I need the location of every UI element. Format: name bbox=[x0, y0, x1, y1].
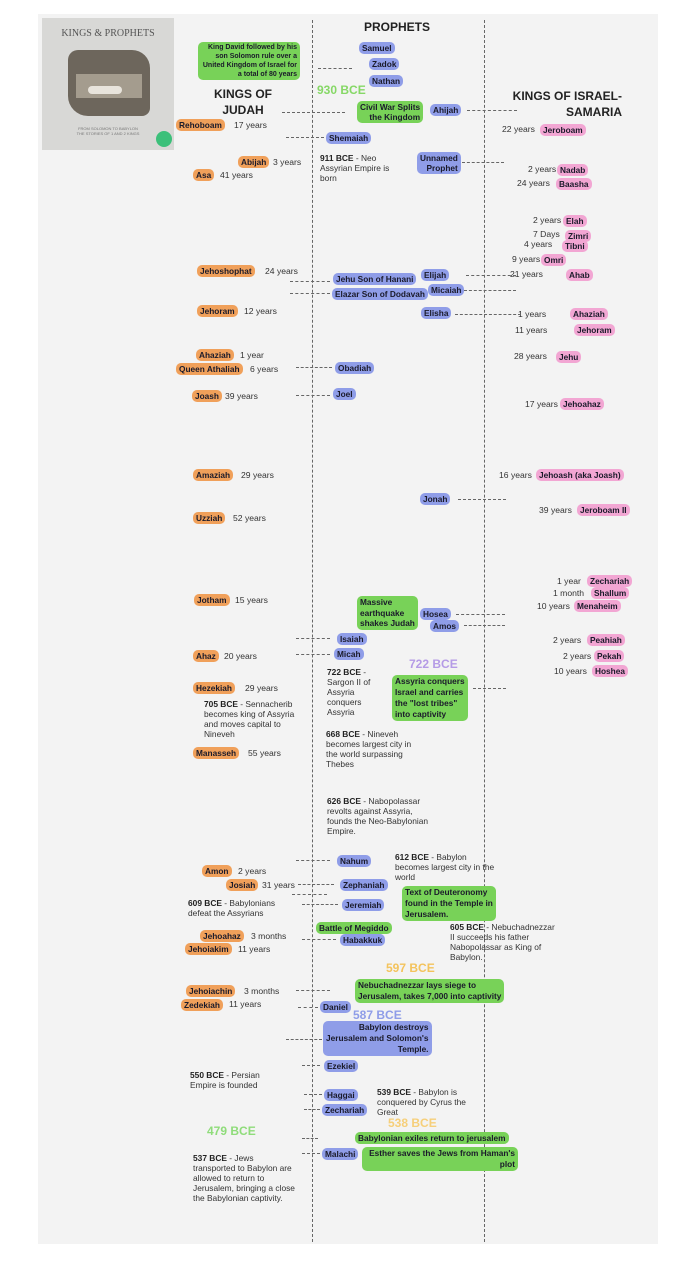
event: siege: Jerusalem, takes 7,000 into captivity bbox=[358, 991, 501, 1001]
kings: Amon, Josiah: Amon bbox=[205, 866, 229, 876]
event: earthquake bbox=[357, 596, 418, 630]
prophet: Samuel: Samuel bbox=[362, 43, 392, 53]
text: 705 BCE: 705 BCE - Sennacherib becomes king of Assyria and moves capital to Nineveh bbox=[204, 699, 294, 739]
text: 21 years bbox=[510, 269, 543, 279]
text: 722 BCE Sargon: 722 BCE - Sargon II of Assyria conquers Assyria bbox=[327, 667, 370, 717]
text: 52 years bbox=[233, 513, 266, 523]
event: Esther: Esther saves the Jews from Haman's plot bbox=[369, 1148, 515, 1169]
event: Deuteronomy: Jerusalem. bbox=[405, 909, 448, 919]
prophet: Ezekiel: Ezekiel bbox=[327, 1061, 355, 1071]
text: 11 years bbox=[238, 944, 270, 954]
text: 11 years bbox=[515, 325, 547, 335]
event: earthquake: shakes Judah bbox=[360, 618, 415, 628]
event: Assyria conquers Israel: Assyria conquers bbox=[395, 676, 465, 686]
text: 539 BCE: 539 BCE - Babylon is conquered by Cyrus the Great bbox=[377, 1087, 466, 1117]
text: 10 years bbox=[554, 666, 587, 676]
prophet: Nahum: Nahum bbox=[340, 856, 368, 866]
date: 538 BCE: 538 BCE bbox=[388, 1116, 437, 1130]
prophets: Hosea, Amos, Isaiah, Micah: Hosea bbox=[423, 609, 448, 619]
text: Zimri bbox=[568, 231, 588, 241]
king: Jeroboam: 22 years bbox=[502, 124, 535, 134]
text: Omri bbox=[544, 255, 563, 265]
prophet: Jonah: Jonah bbox=[423, 494, 447, 504]
text: 2 years bbox=[238, 866, 266, 876]
text: Micah bbox=[337, 649, 361, 659]
text: Jeremiah bbox=[345, 900, 381, 910]
text: Jeroboam bbox=[543, 125, 583, 135]
event: siege bbox=[355, 979, 504, 1003]
prophets: Haggai, Zechariah: Haggai bbox=[327, 1090, 355, 1100]
date: 930 BCE: 930 BCE bbox=[317, 83, 366, 97]
prophet: Nathan: Nathan bbox=[372, 76, 400, 86]
event: Battle of Megiddo: Battle of Megiddo bbox=[319, 923, 389, 933]
kings: Amon, Josiah bbox=[202, 865, 232, 877]
kings: Jehoiachin, Zedekiah: Jehoiachin bbox=[189, 986, 232, 996]
text: Menaheim bbox=[577, 601, 618, 611]
prophet: Daniel: Daniel bbox=[323, 1002, 348, 1012]
king: Jotham: Jotham bbox=[197, 595, 227, 605]
text: Elisha bbox=[424, 308, 448, 318]
text: 626 BCE: 626 BCE - Nabopolassar revolts against Assyria, founds the Neo-Babylonian Empire. bbox=[327, 796, 428, 836]
text: 17 years bbox=[234, 120, 267, 130]
text: 29 years bbox=[245, 683, 278, 693]
text: 7 Days bbox=[533, 229, 560, 239]
text: 41 years bbox=[220, 170, 253, 180]
king: Jotham bbox=[194, 594, 230, 606]
text: Joash bbox=[195, 391, 219, 401]
text: 911 BCE: 911 BCE - Neo Assyrian Empire is born bbox=[320, 153, 389, 183]
text: Jehoash (aka Joash) bbox=[539, 470, 621, 480]
king: Asa: Asa bbox=[196, 170, 211, 180]
cover image: Kings & Prophets: THE STORIES OF 1 AND 2 KINGS bbox=[77, 131, 139, 136]
prophets: Zephaniah, Jeremiah: Zephaniah bbox=[343, 880, 384, 890]
prophet: Zadok bbox=[369, 58, 399, 70]
event: civil war bbox=[357, 101, 423, 123]
heading: kings of judah: KINGS OF JUDAH bbox=[214, 87, 272, 117]
date: 722 BCE: 722 BCE bbox=[409, 657, 458, 671]
king: Jehoshophat: Jehoshophat bbox=[200, 266, 252, 276]
kings: Peahiah, Pekah, Hoshea: 2 years bbox=[553, 635, 581, 645]
date: 479 BCE: 479 BCE bbox=[207, 1124, 256, 1138]
kings: Zechariah, Shallum, Menaheim: 1 year bbox=[557, 576, 581, 586]
prophet: Unnamed Prophet bbox=[417, 152, 461, 174]
text: 55 years bbox=[248, 748, 281, 758]
text: 668 BCE: 668 BCE - Nineveh becomes largest city in the world surpassing Thebes bbox=[326, 729, 411, 769]
text: Josiah bbox=[229, 880, 255, 890]
text: 31 years bbox=[262, 880, 295, 890]
prophet: Unnamed Prophet: Unnamed bbox=[420, 153, 458, 163]
text: 612 BCE: 612 BCE - Babylon becomes largest city in the world bbox=[395, 852, 494, 882]
event: siege: Nebuchadnezzar lays siege to bbox=[358, 980, 476, 990]
kings: Ahaziah, Jehoram (Israel): 1 years bbox=[518, 309, 546, 319]
king: Hezekiah: Hezekiah bbox=[196, 683, 232, 693]
text: 537 BCE: 537 BCE - Jews transported to Babylon are allowed to return to Jerusalem, bringing a close the Babylonian captivity. bbox=[193, 1153, 295, 1203]
event: Assyria conquers Israel: into captivity bbox=[395, 709, 446, 719]
prophet: Malachi: Malachi bbox=[325, 1149, 355, 1159]
king: Ahaz: Ahaz bbox=[196, 651, 216, 661]
kings: Jehoash, Jeroboam II: 16 years bbox=[499, 470, 532, 480]
text: Shallum bbox=[594, 588, 626, 598]
text: 29 years bbox=[241, 470, 274, 480]
text: 20 years bbox=[224, 651, 257, 661]
event: Babylon destroys Jerusalem: Jerusalem and Solomon's bbox=[326, 1033, 428, 1043]
text: 39 years bbox=[225, 391, 258, 401]
text: 2 years bbox=[563, 651, 591, 661]
text: 3 months bbox=[251, 931, 286, 941]
kings: Amaziah, Uzziah: Amaziah bbox=[196, 470, 230, 480]
king: Ahaz bbox=[193, 650, 219, 662]
text: Hoshea bbox=[595, 666, 625, 676]
text: Zedekiah bbox=[184, 1000, 220, 1010]
text: Amos bbox=[433, 621, 456, 631]
event: Deuteronomy bbox=[402, 886, 496, 921]
event: Assyria conquers Israel bbox=[392, 675, 468, 721]
callout: united kingdom: King David followed by his son Solomon rule over a United Kingdom of Israel for a total of 80 years bbox=[203, 44, 297, 78]
king: Abijah: Abijah bbox=[241, 157, 266, 167]
text: Elijah bbox=[424, 270, 446, 280]
prophet: Habakkuk: Habakkuk bbox=[343, 935, 382, 945]
event: exiles return: Babylonian exiles return to jerusalem bbox=[358, 1133, 506, 1143]
text: Zechariah bbox=[325, 1105, 364, 1115]
event: earthquake: earthquake bbox=[360, 608, 404, 618]
prophets: Obadiah, Joel: Obadiah bbox=[338, 363, 371, 373]
event: civil war: Civil War Splits bbox=[360, 102, 420, 112]
text: 12 years bbox=[244, 306, 277, 316]
prophet: Nathan bbox=[369, 75, 403, 87]
event: Deuteronomy: found in the Temple in bbox=[405, 898, 493, 908]
text: Elah bbox=[566, 216, 584, 226]
text: Pekah bbox=[597, 651, 621, 661]
date: 587 BCE: 587 BCE bbox=[353, 1008, 402, 1022]
text: Ahab bbox=[569, 270, 590, 280]
text: Jehoiakim bbox=[188, 944, 229, 954]
event: earthquake: Massive bbox=[360, 597, 392, 607]
text: Uzziah bbox=[196, 513, 222, 523]
text: Tibni bbox=[565, 241, 585, 251]
text: 609 BCE: 609 BCE - Babylonians defeat the Assyrians bbox=[188, 898, 275, 918]
prophet: Malachi bbox=[322, 1148, 358, 1160]
kings: Elah to Ahab: 2 years bbox=[533, 215, 561, 225]
text: Jehoram bbox=[577, 325, 612, 335]
event: Assyria conquers Israel: Israel and carries bbox=[395, 687, 463, 697]
text: Ahaziah bbox=[573, 309, 605, 319]
prophet: Ahijah bbox=[430, 104, 461, 116]
text: 15 years bbox=[235, 595, 268, 605]
cover image: Kings & Prophets: KINGS & PROPHETS bbox=[61, 28, 155, 39]
heading: prophets: PROPHETS bbox=[364, 20, 430, 34]
event: Assyria conquers Israel: the "lost tribes" bbox=[395, 698, 457, 708]
text: Jehoahaz bbox=[563, 399, 601, 409]
text: 1 year bbox=[240, 350, 264, 360]
text: 17 years bbox=[525, 399, 558, 409]
date: 597 BCE: 597 BCE bbox=[386, 961, 435, 975]
prophet: Nahum bbox=[337, 855, 371, 867]
prophet: Ezekiel bbox=[324, 1060, 358, 1072]
heading: kings of israel bbox=[513, 89, 622, 119]
text: Nadab bbox=[560, 165, 585, 175]
prophet: Daniel bbox=[320, 1001, 351, 1013]
text: Isaiah bbox=[340, 634, 364, 644]
prophets: Jehu, Elazar, Elijah, Micaiah, Elisha: Jehu Son of Hanani bbox=[336, 274, 413, 284]
heading: kings of israel: KINGS OF ISRAEL- bbox=[513, 89, 622, 103]
prophets: Hosea, Amos, Isaiah, Micah bbox=[420, 608, 451, 620]
text: 39 years bbox=[539, 505, 572, 515]
prophet: Zadok: Zadok bbox=[372, 59, 396, 69]
text: Queen Athaliah bbox=[179, 364, 240, 374]
cover image: Kings & Prophets: FROM SOLOMON TO BABYLON bbox=[78, 126, 138, 131]
text: 24 years bbox=[265, 266, 298, 276]
event: Babylon destroys Jerusalem: Temple. bbox=[398, 1044, 428, 1054]
event: Deuteronomy: Text of Deuteronomy bbox=[405, 887, 487, 897]
prophet: Shemaiah: Shemaiah bbox=[329, 133, 368, 143]
king: Asa bbox=[193, 169, 214, 181]
prophets: Haggai, Zechariah bbox=[324, 1089, 358, 1101]
king: Manasseh: Manasseh bbox=[196, 748, 236, 758]
text: 1 month bbox=[553, 588, 584, 598]
text: Baasha bbox=[559, 179, 589, 189]
text: Jehu bbox=[559, 352, 578, 362]
text: 550 BCE: 550 BCE - Persian Empire is founded bbox=[190, 1070, 260, 1090]
text: 11 years bbox=[229, 999, 261, 1009]
heading: kings of israel: SAMARIA bbox=[566, 105, 622, 119]
text: 3 years bbox=[273, 157, 301, 167]
text: Jeroboam II bbox=[580, 505, 627, 515]
prophet: Unnamed Prophet: Prophet bbox=[426, 163, 458, 173]
text: 3 months bbox=[244, 986, 279, 996]
text: 605 BCE: 605 BCE - Nebuchadnezzar II succeeds his father Nabopolassar as King of Babylon. bbox=[450, 922, 555, 962]
prophet: Jonah bbox=[420, 493, 450, 505]
king: Jehoram (Judah): Jehoram bbox=[200, 306, 235, 316]
text: Joel bbox=[336, 389, 353, 399]
text: Micaiah bbox=[431, 285, 461, 295]
text: Zechariah bbox=[590, 576, 629, 586]
text: 24 years bbox=[517, 178, 550, 188]
prophet: Samuel bbox=[359, 42, 395, 54]
event: Babylon destroys Jerusalem: Babylon destroys bbox=[359, 1022, 428, 1032]
text: Peahiah bbox=[590, 635, 622, 645]
kings: Jehu, Jehoahaz: 28 years bbox=[514, 351, 547, 361]
cover image: Kings & Prophets bbox=[42, 18, 174, 150]
text: 4 years bbox=[524, 239, 552, 249]
kings: Jehoahaz, Jehoiakim: Jehoahaz bbox=[203, 931, 241, 941]
text: 6 years bbox=[250, 364, 278, 374]
kings: Ahaziah, Athaliah, Joash: Ahaziah bbox=[199, 350, 231, 360]
text: 10 years bbox=[537, 601, 570, 611]
prophet: Ahijah: Ahijah bbox=[433, 105, 458, 115]
event: civil war: the Kingdom bbox=[369, 112, 420, 122]
king: Abijah bbox=[238, 156, 269, 168]
text: Elazar Son of Dodavah bbox=[335, 289, 425, 299]
kings: Nadab, Baasha: 2 years bbox=[528, 164, 556, 174]
event: Babylon destroys Jerusalem bbox=[323, 1021, 432, 1056]
text: 9 years bbox=[512, 254, 540, 264]
king: Rehoboam: Rehoboam bbox=[179, 120, 222, 130]
